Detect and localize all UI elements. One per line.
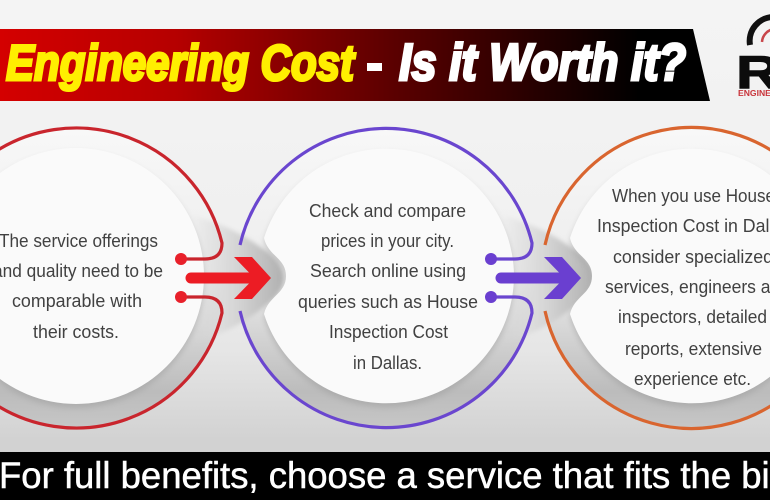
text: The service offerings xyxy=(0,231,158,251)
text: Search online using xyxy=(310,261,466,281)
footer bar xyxy=(0,452,770,500)
connector dots xyxy=(485,253,497,303)
text: queries such as House xyxy=(298,292,478,312)
text xyxy=(0,231,163,342)
text: reports, extensive xyxy=(625,339,762,359)
title: dash xyxy=(367,63,382,71)
circle backing discs xyxy=(0,128,770,428)
title: engineering cost: Engineering Cost xyxy=(6,35,356,91)
panel: right circle xyxy=(545,128,770,428)
connector dots xyxy=(175,253,187,303)
logo: R xyxy=(736,46,770,98)
text: their costs. xyxy=(33,322,119,342)
text: prices in your city. xyxy=(321,231,454,251)
text xyxy=(298,201,478,373)
ring xyxy=(545,128,770,428)
arrow: purple xyxy=(496,257,581,299)
text: Inspection Cost xyxy=(329,322,448,342)
text: Check and compare xyxy=(309,201,466,221)
arrow: red xyxy=(186,257,271,299)
ring xyxy=(240,128,532,428)
panel: left circle xyxy=(0,128,222,428)
text: comparable with xyxy=(12,291,142,311)
panel: middle circle xyxy=(240,128,532,428)
text: experience etc. xyxy=(634,369,751,389)
text xyxy=(597,186,770,389)
ring xyxy=(0,128,222,428)
text: in Dallas. xyxy=(353,353,422,373)
title: is it worth it: Is it Worth it? xyxy=(399,34,686,92)
logo xyxy=(736,17,770,98)
title banner xyxy=(0,29,710,101)
text: inspectors, detailed xyxy=(618,307,767,327)
